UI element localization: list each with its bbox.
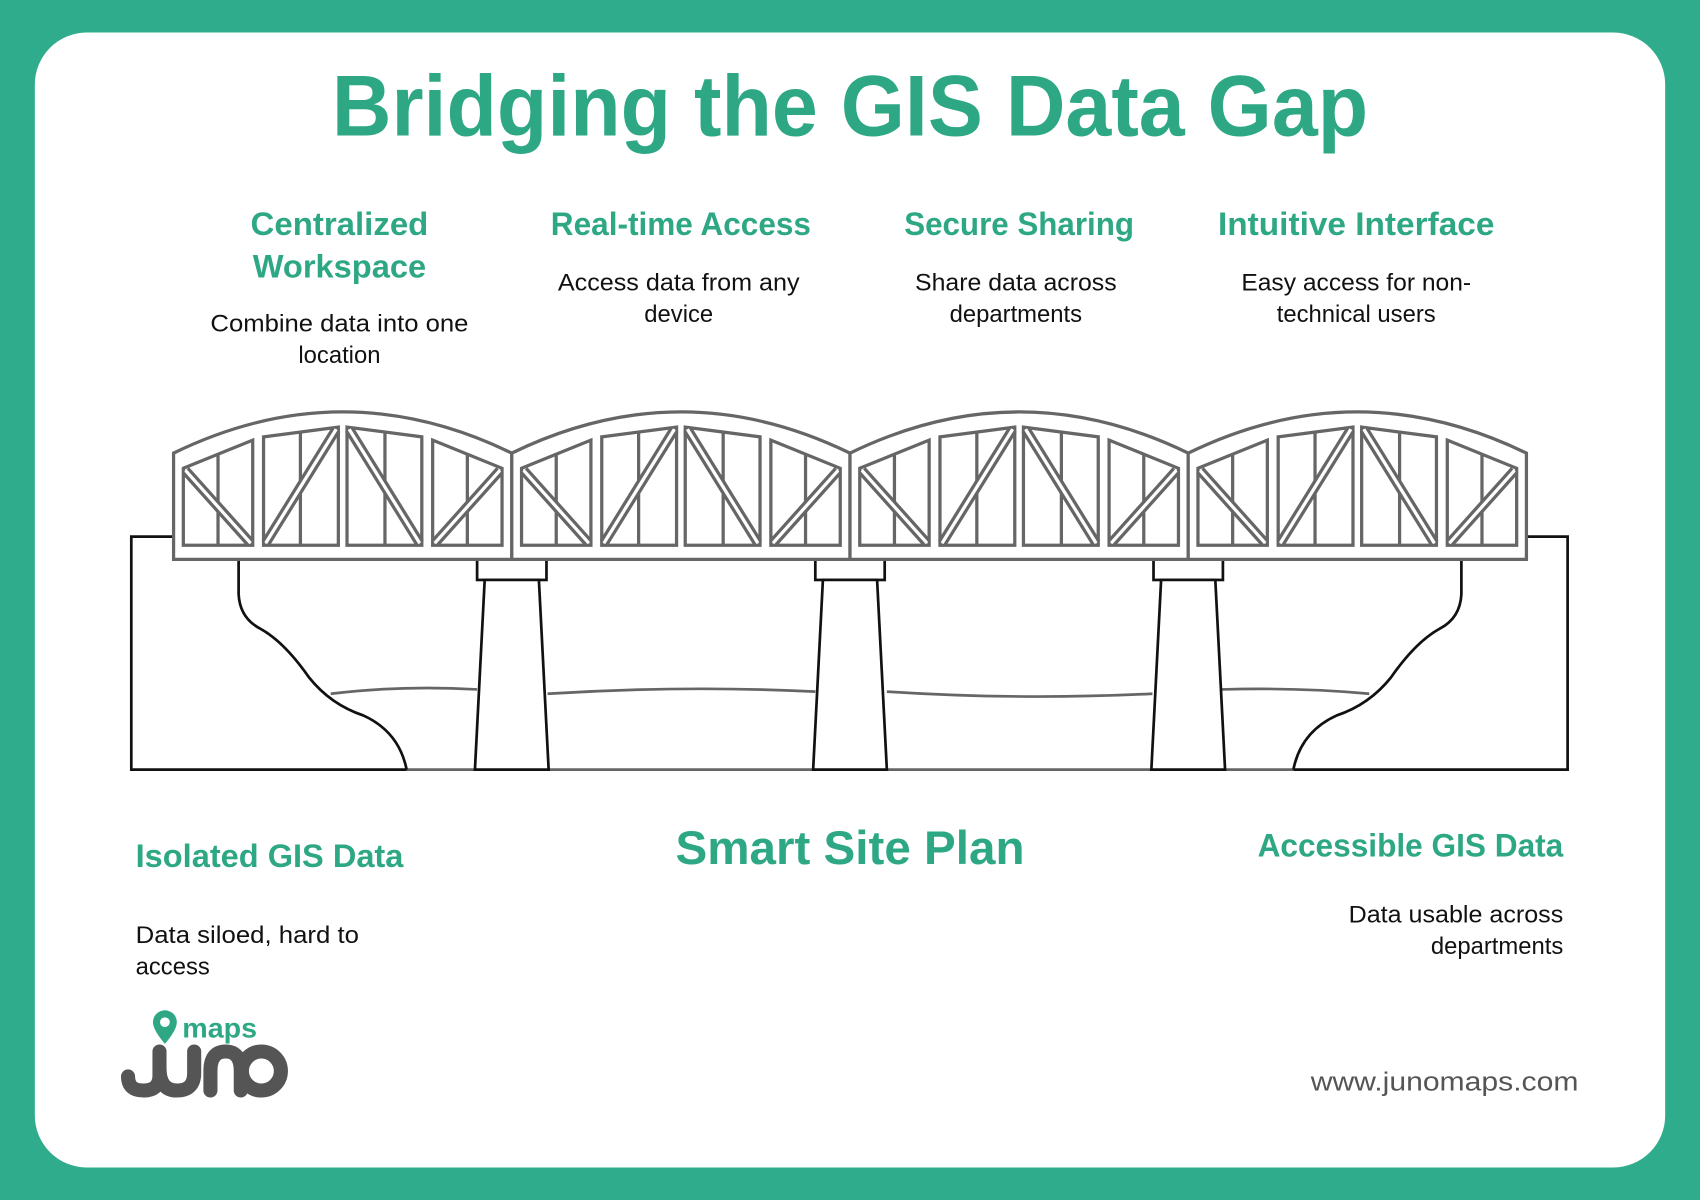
label: Accessible GIS Data: departments [1431, 933, 1563, 960]
logo: juno maps: maps [182, 1011, 257, 1043]
feature: Real-time Access: device [644, 301, 713, 328]
feature: Real-time Access [551, 206, 811, 328]
website url: www.junomaps.com [1310, 1067, 1578, 1097]
feature: Secure Sharing: departments [950, 301, 1082, 328]
feature: Real-time Access: Real-time Access [551, 206, 811, 242]
feature: Centralized Workspace: Combine data into one [210, 311, 468, 338]
bridge illustration [131, 412, 1568, 770]
title: Bridging the GIS Data Gap [332, 58, 1368, 155]
logo: juno maps [128, 1010, 281, 1091]
feature: Centralized Workspace: location [298, 342, 381, 369]
feature: Centralized Workspace [210, 206, 468, 369]
feature: Secure Sharing [904, 206, 1134, 328]
feature: Intuitive Interface: Intuitive Interface [1218, 206, 1494, 242]
feature: Intuitive Interface [1218, 206, 1494, 328]
label: Isolated GIS Data [136, 838, 404, 981]
label: Isolated GIS Data: Data siloed, hard to [136, 922, 359, 949]
feature: Intuitive Interface: Easy access for non- [1241, 270, 1471, 297]
label: Accessible GIS Data: Data usable across [1349, 901, 1563, 928]
label: Isolated GIS Data: Isolated GIS Data [136, 838, 404, 874]
feature: Secure Sharing: Share data across [915, 270, 1117, 297]
label: Accessible GIS Data: Accessible GIS Data [1258, 827, 1564, 863]
feature: Intuitive Interface: technical users [1277, 301, 1436, 328]
label: Accessible GIS Data [1258, 827, 1564, 960]
feature: Centralized Workspace: Workspace [253, 249, 426, 285]
feature: Real-time Access: Access data from any [558, 270, 800, 297]
feature: Secure Sharing: Secure Sharing [904, 206, 1134, 242]
label: Isolated GIS Data: access [136, 954, 210, 981]
label: Smart Site Plan: Smart Site Plan [675, 822, 1025, 875]
feature: Centralized Workspace: Centralized [251, 206, 428, 242]
